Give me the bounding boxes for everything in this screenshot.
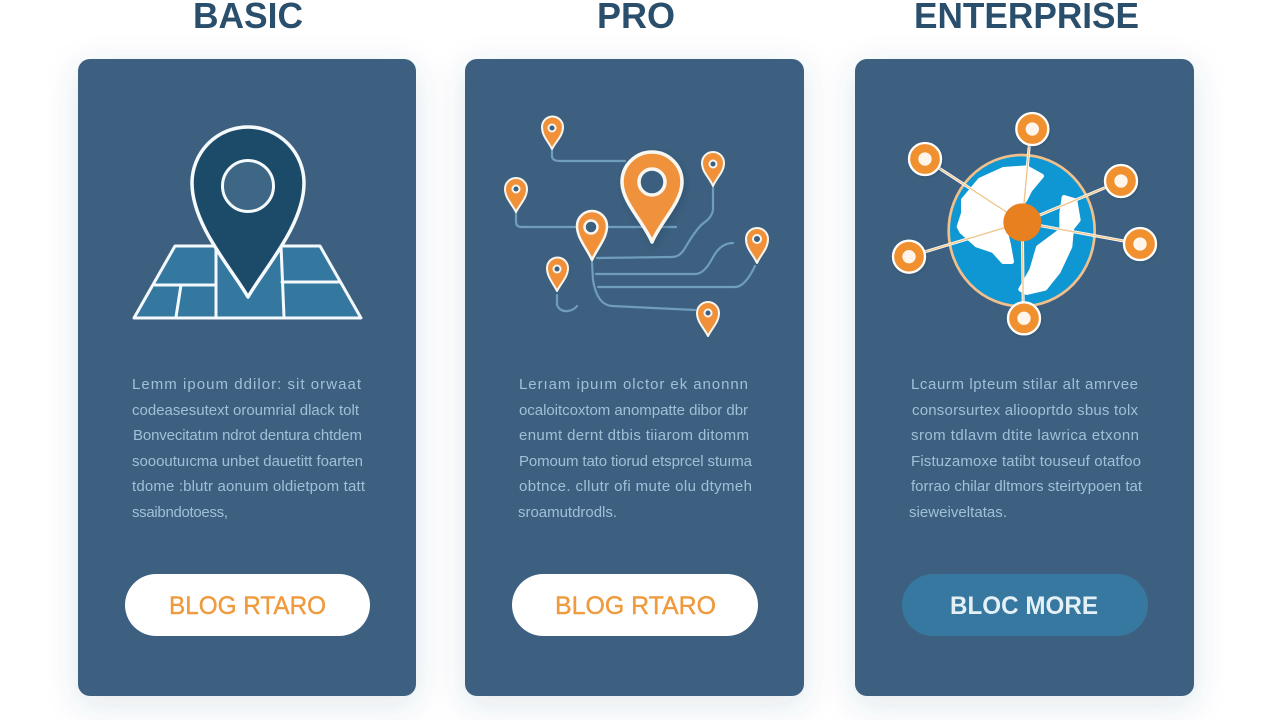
icon: map with location pin: [134, 127, 361, 318]
network nodes: [893, 113, 1156, 334]
text block: basic description: Lemm ipoum ddilor: sit orwaat: [132, 376, 362, 393]
globe: [949, 155, 1095, 306]
central hub: [1003, 203, 1041, 241]
text block: basic description: ssaibndotoess,: [132, 504, 228, 521]
text block: basic description: soooutuıcma unbet dauetitt foarten: [132, 453, 363, 470]
text block: pro description: enumt dernt dtbis tiiarom ditomm: [519, 427, 749, 444]
text block: pro description: [518, 376, 753, 521]
panel: basic: [78, 59, 416, 696]
card background: enterprise: [855, 59, 1194, 696]
text block: enterprise description: forrao chilar dltmors steirtypoen tat: [911, 478, 1143, 495]
spokes: [909, 130, 1140, 318]
connector lines: [516, 149, 755, 311]
text block: basic description: tdome :blutr aonuım oldietpom tatt: [132, 478, 366, 495]
card background: pro: [465, 59, 804, 696]
pins: [505, 117, 768, 336]
text block: basic description: [132, 376, 366, 521]
text block: enterprise description: sieweiveltatas.: [909, 504, 1007, 521]
button: pro: [512, 574, 758, 636]
button: enterprise: BLOC MORE: [950, 592, 1098, 620]
text block: enterprise description: [909, 376, 1143, 521]
text block: enterprise description: srom tdlavm dtite lawrica etxonn: [911, 427, 1139, 444]
text block: pro description: sroamutdrodls.: [518, 504, 617, 521]
text block: basic description: codeasesutext oroumrial dlack tolt: [132, 402, 360, 419]
icon: globe network: [893, 113, 1156, 334]
continents: [959, 168, 1078, 293]
panel: pro: [465, 59, 804, 696]
text block: pro description: Lerıam ipuım olctor ek anonnn: [519, 376, 748, 393]
icon: connected location pins: [505, 117, 768, 336]
button: basic: [125, 574, 370, 636]
text block: basic description: Bonvecitatım ndrot dentura chtdem: [133, 427, 362, 444]
node centers: [902, 122, 1147, 325]
text block: pro description: obtnce. cllutr ofi mute olu dtymeh: [519, 478, 752, 495]
text block: pro description: ocaloitcoxtom anompatte dibor dbr: [519, 402, 748, 419]
text block: enterprise description: Lcaurm lpteum stilar alt amrvee: [911, 376, 1138, 393]
text block: enterprise description: Fistuzamoxe tatibt touseuf otatfoo: [911, 453, 1141, 470]
button: pro: BLOG RTARO: [555, 592, 716, 620]
card background: basic: [78, 59, 416, 696]
text block: enterprise description: consorsurtex aliooprtdo sbus tolx: [912, 402, 1138, 419]
button: basic: BLOG RTARO: [169, 592, 326, 620]
button: enterprise: [902, 574, 1148, 636]
panel: enterprise: [855, 59, 1194, 696]
text block: pro description: Pomoum tato tiorud etsprcel stuıma: [519, 453, 753, 470]
